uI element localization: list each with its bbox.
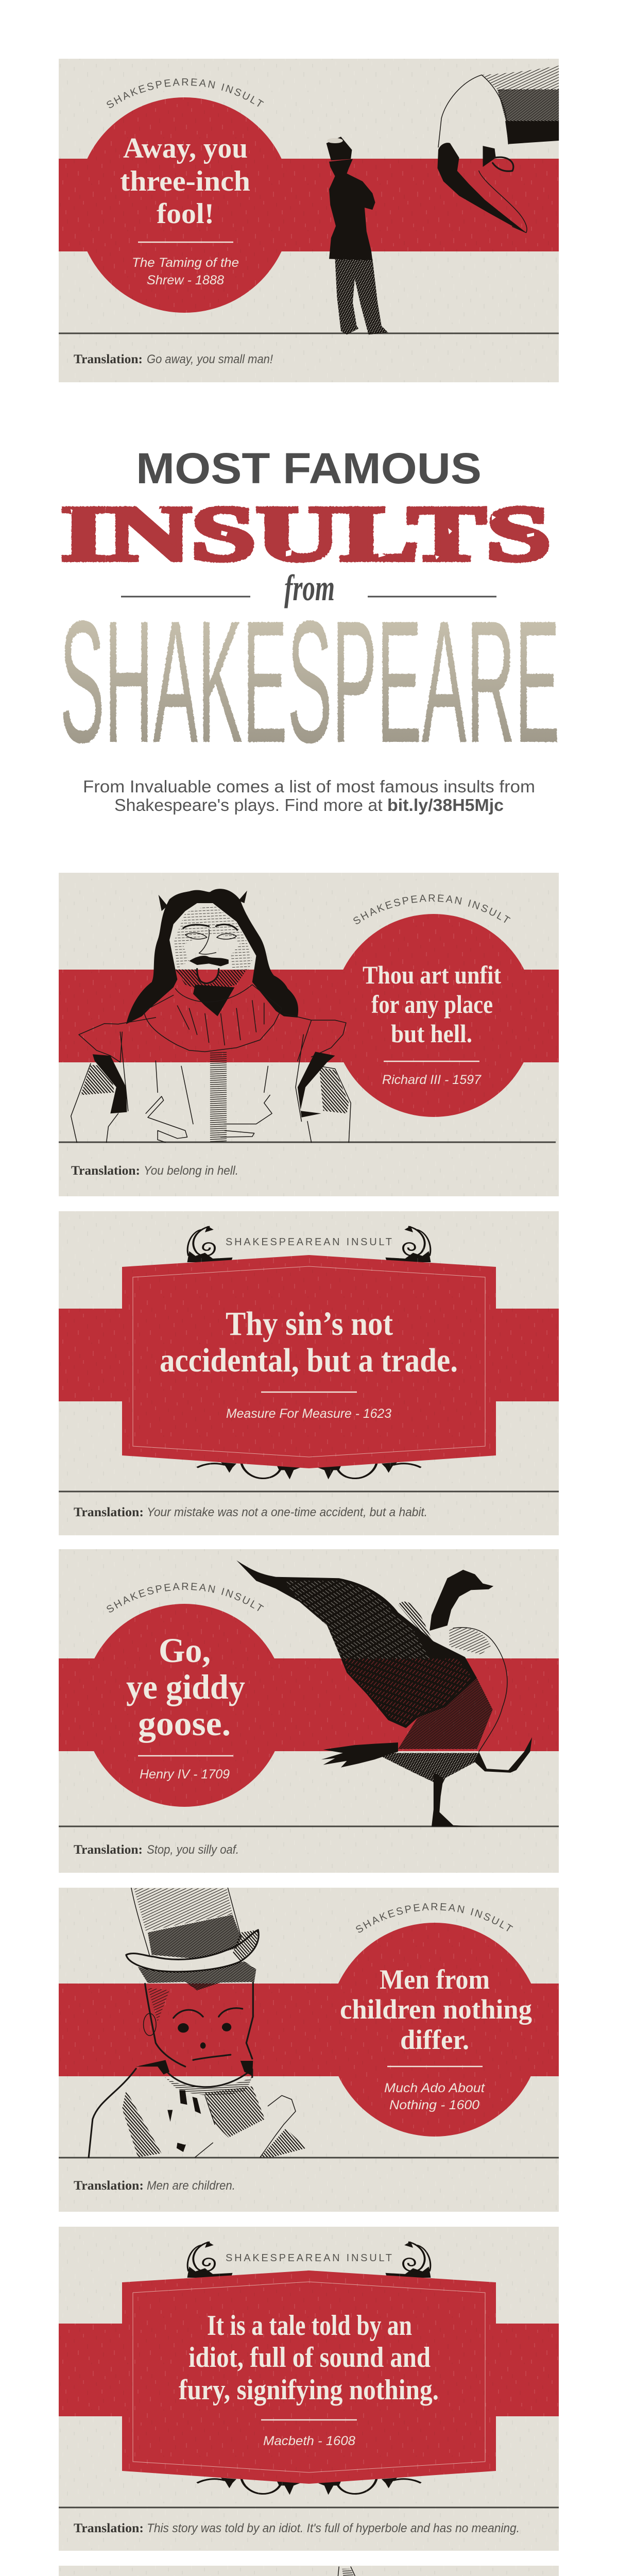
source play: Macbeth - 1608 (263, 2434, 355, 2448)
translation: Men are children. (147, 2179, 235, 2193)
flourishes (187, 2242, 431, 2495)
panel: insult card 2, Richard III (59, 873, 559, 1196)
flourishes (187, 1226, 431, 1479)
translation (74, 352, 273, 366)
quote: Thy sin’s not (226, 1305, 393, 1343)
translation: Go away, you small man! (147, 352, 273, 366)
quote: children nothing (340, 1994, 532, 2025)
curved label: SHAKESPEAREAN INSULT (356, 1903, 513, 1933)
illustration: small man in top hat (327, 137, 388, 334)
ground line (59, 1491, 559, 1492)
illustration: donkey (319, 2567, 559, 2576)
quote: for any place (371, 990, 493, 1019)
ribbon banner (122, 2270, 496, 2484)
ground line (59, 1142, 556, 1143)
translation: Stop, you silly oaf. (147, 1843, 239, 1857)
source play: Richard III - 1597 (382, 1073, 482, 1087)
translation: You belong in hell. (144, 1164, 238, 1178)
translation (74, 2179, 235, 2193)
source play: Much Ado About (384, 2081, 485, 2095)
translation (71, 1164, 238, 1178)
panel: insult card 3, Measure for Measure (59, 1211, 559, 1535)
quote: It is a tale told by an (207, 2310, 412, 2342)
label: SHAKESPEAREAN INSULT (226, 2252, 392, 2264)
quote: idiot, full of sound and (188, 2342, 431, 2374)
heading: insults: INSULTS (61, 490, 551, 578)
quote: Thou art unfit (363, 960, 501, 989)
quote: Away, you (123, 132, 248, 164)
translation: Translation: (74, 352, 143, 366)
ground line (59, 2507, 559, 2508)
illustration: laughing devil man (71, 889, 351, 1142)
illustration: flapping goose (236, 1561, 532, 1826)
quote (340, 1964, 532, 2055)
source play (132, 256, 239, 287)
intro text (83, 777, 535, 815)
panel: insult card 5, Much Ado About Nothing (59, 1888, 559, 2212)
ground line (59, 333, 559, 334)
quote: fury, signifying nothing. (179, 2374, 439, 2406)
quote (160, 1305, 458, 1379)
red circle (83, 1604, 286, 1807)
intro text: From Invaluable comes a list of most famous insults from (83, 777, 535, 796)
curved label: SHAKESPEAREAN INSULT (107, 1583, 264, 1613)
source play: Henry IV - 1709 (140, 1767, 230, 1782)
quote: accidental, but a trade. (160, 1342, 458, 1379)
red circle (332, 914, 535, 1117)
intro text: Shakespeare's plays. Find more at bit.ly/38H5Mjc (114, 795, 504, 815)
quote (126, 1631, 245, 1743)
translation: Translation: (71, 1164, 140, 1178)
quote: goose. (138, 1704, 231, 1743)
translation (74, 1843, 239, 1857)
quote: fool! (157, 198, 214, 230)
heading: most famous: MOST FAMOUS (136, 444, 482, 493)
translation: Your mistake was not a one-time accident, but a habit. (147, 1505, 427, 1519)
red circle (77, 97, 292, 313)
panel: insult card 4, Henry IV (59, 1549, 559, 1873)
ground line (59, 2157, 559, 2159)
translation: Translation: (74, 2179, 144, 2193)
source play: Shrew - 1888 (147, 273, 224, 287)
title block (60, 444, 560, 815)
translation: Translation: (74, 1843, 143, 1857)
ribbon banner (122, 1255, 496, 1468)
source play: Nothing - 1600 (389, 2098, 479, 2112)
quote: Men from (380, 1964, 490, 1995)
ground line (59, 1826, 559, 1827)
source play: Measure For Measure - 1623 (226, 1406, 391, 1421)
curved label: SHAKESPEAREAN INSULT (107, 78, 264, 108)
source play (384, 2081, 485, 2112)
panel: insult card 7, Hamlet (59, 2566, 559, 2576)
translation: This story was told by an idiot. It's full of hyperbole and has no meaning. (147, 2521, 520, 2535)
translation: Translation: (74, 2521, 144, 2535)
illustration: giant hand reaching down (437, 66, 559, 233)
curved label: SHAKESPEAREAN INSULT (353, 894, 511, 924)
quote (179, 2310, 439, 2406)
translation: Translation: (74, 1505, 144, 1519)
source play: The Taming of the (132, 256, 239, 270)
quote: Go, (159, 1631, 211, 1670)
quote: but hell. (391, 1019, 472, 1048)
heading: from, with side rules: from (284, 567, 335, 608)
quote: ye giddy (126, 1667, 245, 1706)
red circle (328, 1923, 542, 2137)
panel: insult card 1, The Taming of the Shrew (59, 59, 559, 382)
label: SHAKESPEAREAN INSULT (226, 1236, 392, 1248)
quote (363, 960, 501, 1048)
quote (120, 132, 250, 230)
panel: insult card 6, Macbeth (59, 2227, 559, 2551)
illustration: boy in top hat (89, 1888, 306, 2157)
quote: three-inch (120, 165, 250, 197)
quote: differ. (400, 2024, 469, 2055)
heading: insults (61, 490, 551, 578)
